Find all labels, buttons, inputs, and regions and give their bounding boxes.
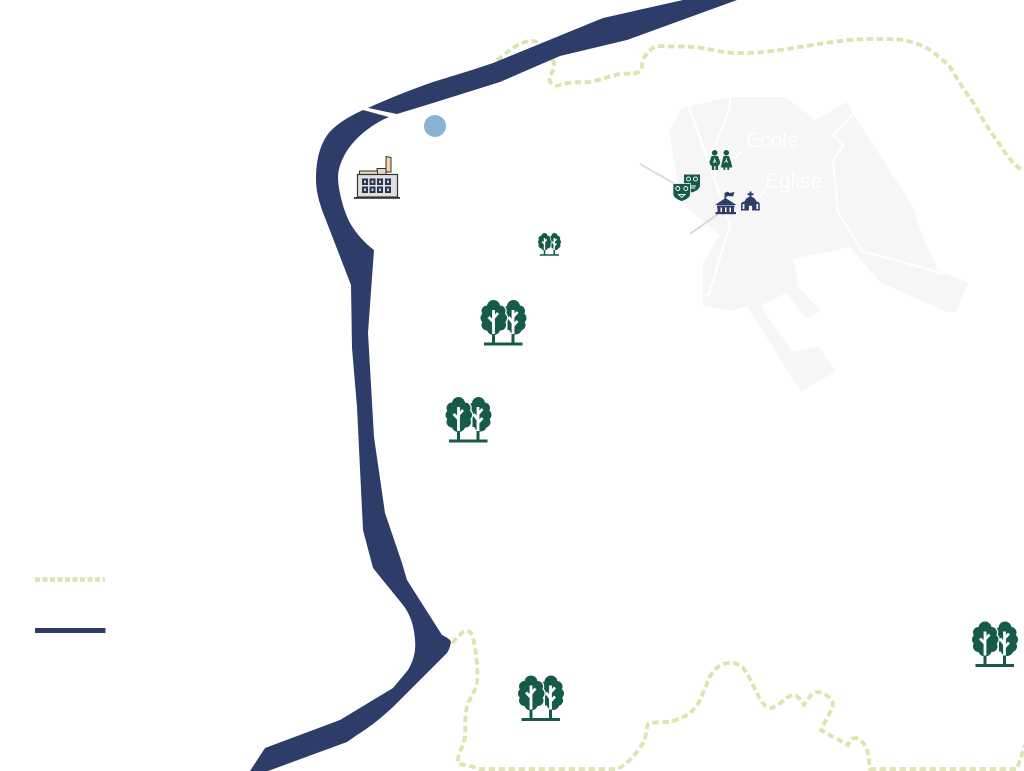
icon: factory	[354, 156, 400, 199]
leader line: town hall	[690, 214, 718, 234]
label: École: École	[746, 129, 799, 152]
icon: school children	[709, 150, 732, 170]
border: south dashed line	[452, 631, 1024, 769]
icon: small trees	[538, 233, 561, 256]
label: École	[733, 129, 799, 160]
town area	[669, 97, 968, 392]
label: Église: Église	[765, 170, 822, 193]
icon: theatre masks	[673, 174, 700, 202]
icon: trees east	[972, 622, 1018, 667]
river	[250, 0, 737, 771]
leader line: theatre	[640, 164, 675, 184]
legend: river line sample	[35, 628, 106, 633]
border: north dashed line	[497, 39, 1022, 170]
label: Église	[757, 170, 822, 199]
icon: town hall	[715, 192, 736, 214]
icon: trees north	[480, 300, 526, 346]
icon: trees centre	[446, 397, 492, 442]
icon: church	[741, 192, 760, 210]
icon: trees south	[518, 676, 564, 721]
legend: border line sample	[35, 577, 105, 582]
water point marker	[424, 115, 446, 137]
